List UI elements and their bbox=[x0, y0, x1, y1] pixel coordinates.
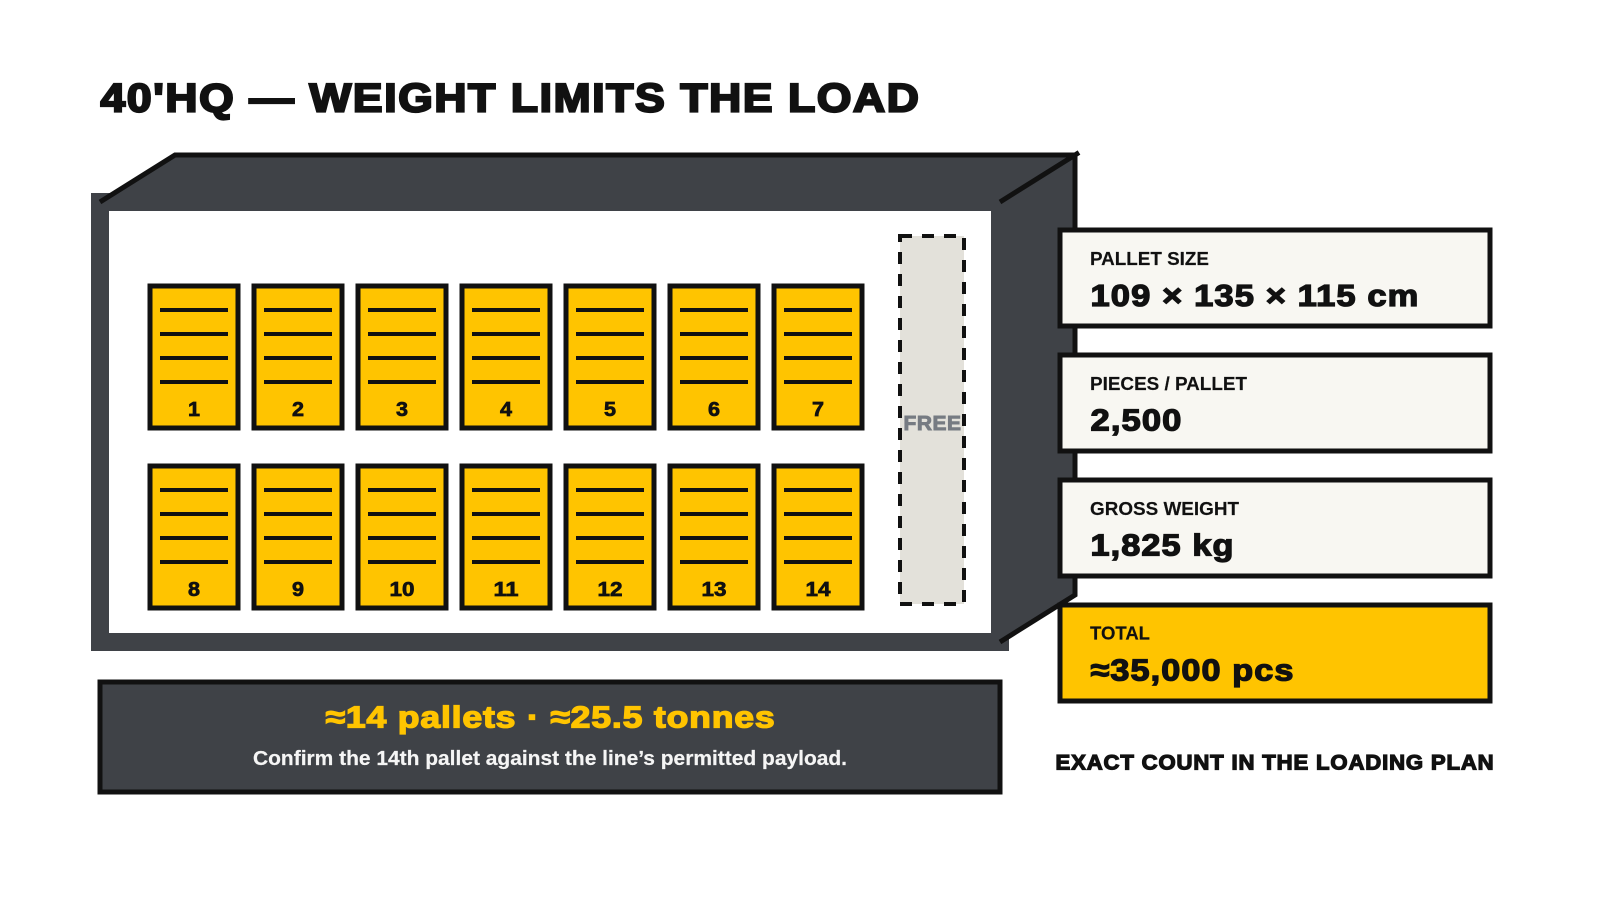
pallet 14: 14 bbox=[806, 579, 831, 601]
pallet 11 bbox=[462, 466, 550, 608]
pallet 4: 4 bbox=[500, 399, 513, 421]
footnote: EXACT COUNT IN THE LOADING PLAN bbox=[1056, 752, 1494, 774]
pallet 3: 3 bbox=[396, 399, 408, 421]
pallet 8 bbox=[150, 466, 238, 608]
pallet 7 bbox=[774, 286, 862, 428]
card: total: TOTAL bbox=[1090, 624, 1150, 644]
card: total: ≈35,000 pcs bbox=[1090, 652, 1294, 688]
card: pieces per pallet: 2,500 bbox=[1090, 402, 1182, 438]
pallet 10: 10 bbox=[390, 579, 414, 601]
pallet 14 bbox=[774, 466, 862, 608]
pallet 7: 7 bbox=[812, 399, 824, 421]
card: pallet size: 109 × 135 × 115 cm bbox=[1090, 278, 1420, 313]
pallet 2 bbox=[254, 286, 342, 428]
card: pieces per pallet bbox=[1060, 355, 1490, 451]
card: gross weight: 1,825 kg bbox=[1090, 528, 1234, 562]
pallet 5: 5 bbox=[604, 399, 616, 421]
pallet 3 bbox=[358, 286, 446, 428]
pallet 6: 6 bbox=[708, 399, 720, 421]
pallet 8: 8 bbox=[188, 579, 200, 601]
card: total bbox=[1060, 605, 1490, 701]
container front frame bbox=[100, 202, 1000, 642]
pallet 6 bbox=[670, 286, 758, 428]
free slot: FREE bbox=[904, 413, 962, 435]
card: pieces per pallet: PIECES / PALLET bbox=[1090, 374, 1247, 394]
summary bar bbox=[100, 682, 1000, 792]
pallet 1: 1 bbox=[188, 399, 200, 421]
pallet 1 bbox=[150, 286, 238, 428]
pallet 12 bbox=[566, 466, 654, 608]
card: gross weight: GROSS WEIGHT bbox=[1090, 499, 1239, 519]
pallet 10 bbox=[358, 466, 446, 608]
pallet 11: 11 bbox=[494, 579, 518, 601]
pallet 4 bbox=[462, 286, 550, 428]
pallet 13 bbox=[670, 466, 758, 608]
card: gross weight bbox=[1060, 480, 1490, 576]
pallet 5 bbox=[566, 286, 654, 428]
title: 40'HQ — WEIGHT LIMITS THE LOAD bbox=[100, 76, 921, 120]
container edge lines bbox=[100, 152, 1079, 642]
pallet 2: 2 bbox=[292, 399, 304, 421]
card: pallet size: PALLET SIZE bbox=[1090, 249, 1209, 269]
container bbox=[100, 152, 1079, 642]
pallet 12: 12 bbox=[598, 579, 622, 601]
free slot bbox=[900, 236, 964, 604]
pallet 9 bbox=[254, 466, 342, 608]
pallet 9: 9 bbox=[292, 579, 304, 601]
summary note: Confirm the 14th pallet against the line’s permitted payload. bbox=[253, 748, 847, 770]
card: pallet size bbox=[1060, 230, 1490, 326]
summary headline: ≈14 pallets · ≈25.5 tonnes bbox=[326, 700, 776, 734]
pallet 13: 13 bbox=[702, 579, 726, 601]
container top and side faces bbox=[100, 155, 1075, 642]
